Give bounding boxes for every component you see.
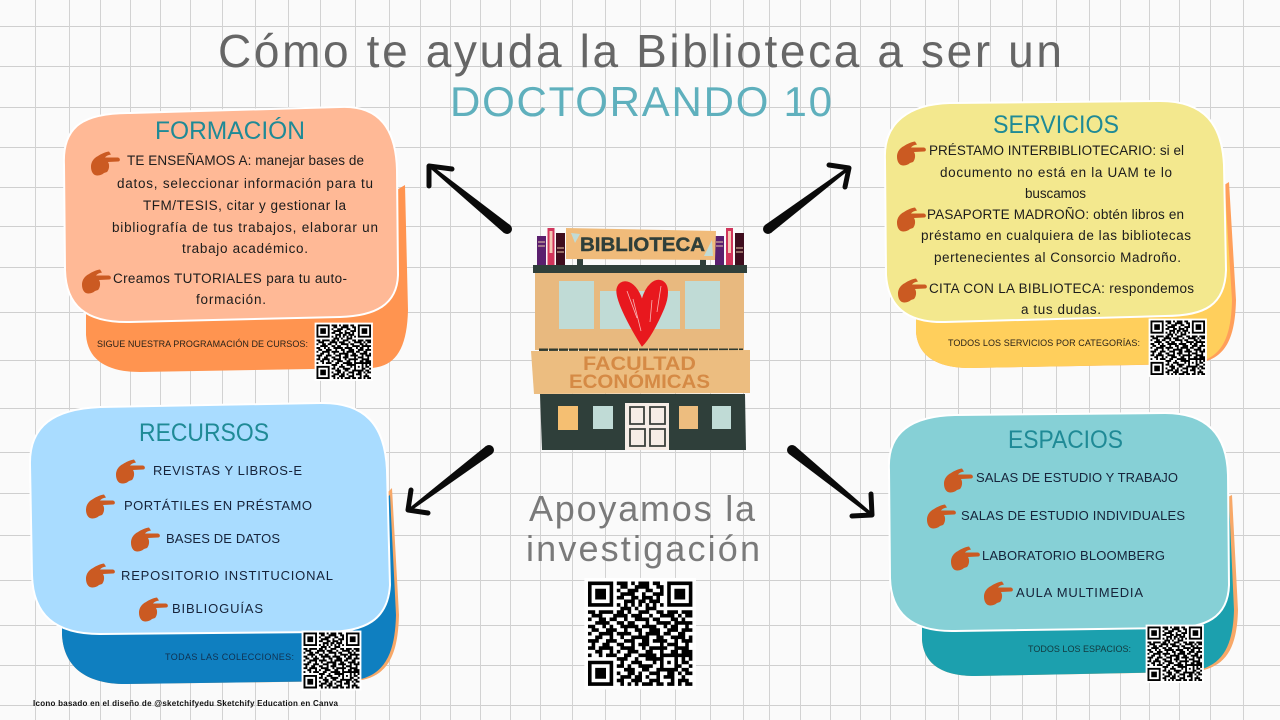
- text: recursos list: [121, 463, 333, 616]
- heading: espacios: ESPACIOS: [1008, 426, 1123, 454]
- credit: Icono basado en el diseño de @sketchifyedu Sketchify Education en Canva: [33, 699, 339, 708]
- roof: [533, 265, 747, 273]
- arrow: to formación: [429, 166, 512, 234]
- icon: pointing hand: [951, 546, 980, 570]
- title: [218, 25, 1062, 125]
- icon: pointing hand: [86, 494, 115, 518]
- door: [625, 403, 669, 450]
- icon: pointing hand: [82, 270, 111, 294]
- heading: apoyamos la investigación: Apoyamos la: [529, 488, 756, 529]
- heading: servicios: SERVICIOS: [993, 111, 1119, 139]
- front card: recursos: [30, 403, 390, 634]
- arrow: to servicios: [763, 165, 850, 234]
- text: recursos list: REPOSITORIO INSTITUCIONAL: [121, 568, 333, 583]
- text: formación body: bibliografía de tus trabajos, elaborar un: [112, 220, 378, 235]
- text: formación body: Creamos TUTORIALES para tu auto-: [113, 271, 347, 286]
- panel: recursos: [30, 403, 399, 690]
- icon: pointing hand: [984, 582, 1013, 606]
- icon: pointing hand: [91, 152, 120, 176]
- ground floor: [540, 394, 746, 450]
- icon: pointing hand: [897, 208, 926, 232]
- text: formación body: [112, 153, 378, 307]
- icon: pointing hand: [897, 142, 926, 166]
- caption: espacios: TODOS LOS ESPACIOS:: [1028, 644, 1131, 654]
- sign: biblioteca: [566, 228, 716, 266]
- icon: pointing hand: [944, 468, 973, 492]
- caption: servicios: TODOS LOS SERVICIOS POR CATEGORÍAS:: [948, 338, 1140, 348]
- text: recursos list: PORTÁTILES EN PRÉSTAMO: [124, 498, 312, 513]
- band: facultad económicas: FACULTAD: [583, 354, 696, 375]
- text: formación body: TFM/TESIS, citar y gestionar la: [143, 198, 346, 213]
- caption: colecciones: TODAS LAS COLECCIONES:: [165, 652, 294, 662]
- qr code: servicios: [1149, 319, 1207, 377]
- icon: pointing hand: [86, 564, 115, 588]
- back card: recursos: [62, 488, 399, 684]
- upper floor: [535, 273, 744, 350]
- arrow: to recursos: [407, 445, 494, 513]
- illustration: library building: [531, 228, 750, 450]
- back card: formación: [86, 185, 408, 372]
- text: servicios body: pertenecientes al Consorcio Madroño.: [934, 250, 1181, 265]
- text: servicios body: PRÉSTAMO INTERBIBLIOTECARIO: si el: [929, 143, 1184, 158]
- panel: espacios: [889, 413, 1238, 683]
- title: DOCTORANDO 10: [450, 78, 832, 125]
- qr code: investigación: [584, 578, 696, 690]
- text: servicios body: [921, 143, 1194, 317]
- icon: pointing hand: [898, 278, 927, 302]
- front card: espacios: [889, 413, 1229, 631]
- text: espacios list: SALAS DE ESTUDIO Y TRABAJO: [976, 470, 1178, 485]
- heading: recursos: RECURSOS: [139, 419, 269, 447]
- heading: apoyamos la investigación: investigación: [526, 528, 760, 569]
- text: recursos list: BASES DE DATOS: [166, 531, 280, 546]
- heading: formación: FORMACIÓN: [155, 116, 305, 145]
- icon: pointing hand: [139, 598, 168, 622]
- back card: servicios: [916, 182, 1236, 368]
- text: recursos list: BIBLIOGUÍAS: [172, 601, 263, 616]
- text: espacios list: AULA MULTIMEDIA: [1016, 585, 1143, 600]
- front card: servicios: [885, 101, 1226, 322]
- text: servicios body: buscamos: [1025, 186, 1086, 201]
- icon: pointing hand: [131, 528, 160, 552]
- panel: formación: [64, 107, 408, 381]
- text: servicios body: PASAPORTE MADROÑO: obtén libros en: [927, 207, 1184, 222]
- text: servicios body: CITA CON LA BIBLIOTECA: respondemos: [929, 281, 1194, 296]
- icon: red heart: [617, 280, 668, 346]
- back card: espacios: [922, 495, 1238, 676]
- panel: servicios: [885, 101, 1236, 377]
- title: Cómo te ayuda la Biblioteca a ser un: [218, 25, 1062, 77]
- band: facultad económicas: ECONÓMICAS: [569, 371, 710, 393]
- sign: biblioteca: BIBLIOTECA: [580, 235, 705, 256]
- caption: cursos: SIGUE NUESTRA PROGRAMACIÓN DE CURSOS:: [97, 339, 308, 349]
- band: facultad económicas: [531, 350, 750, 394]
- text: servicios body: a tus dudas.: [1021, 302, 1101, 317]
- text: servicios body: préstamo en cualquiera de las bibliotecas: [921, 228, 1191, 243]
- arrow: to espacios: [787, 445, 873, 516]
- text: espacios list: [961, 470, 1185, 600]
- text: formación body: trabajo académico.: [182, 241, 308, 256]
- text: formación body: datos, seleccionar información para tu: [117, 176, 373, 191]
- front card: formación: [64, 107, 398, 322]
- text: espacios list: SALAS DE ESTUDIO INDIVIDUALES: [961, 508, 1185, 523]
- qr code: colecciones: [302, 631, 361, 690]
- text: formación body: TE ENSEÑAMOS A: manejar bases de: [127, 153, 364, 168]
- heading: apoyamos la investigación: [526, 488, 760, 569]
- text: recursos list: REVISTAS Y LIBROS-E: [153, 463, 302, 478]
- icon: pointing hand: [116, 460, 145, 484]
- books right: [715, 228, 744, 265]
- books left: [537, 228, 565, 265]
- qr code: espacios: [1146, 625, 1204, 683]
- ground windows: [558, 406, 731, 430]
- text: espacios list: LABORATORIO BLOOMBERG: [982, 548, 1165, 563]
- text: servicios body: documento no está en la UAM te lo: [940, 165, 1172, 180]
- text: formación body: formación.: [196, 292, 266, 307]
- windows: [559, 281, 720, 329]
- qr code: cursos: [315, 323, 373, 381]
- icon: pointing hand: [927, 504, 956, 528]
